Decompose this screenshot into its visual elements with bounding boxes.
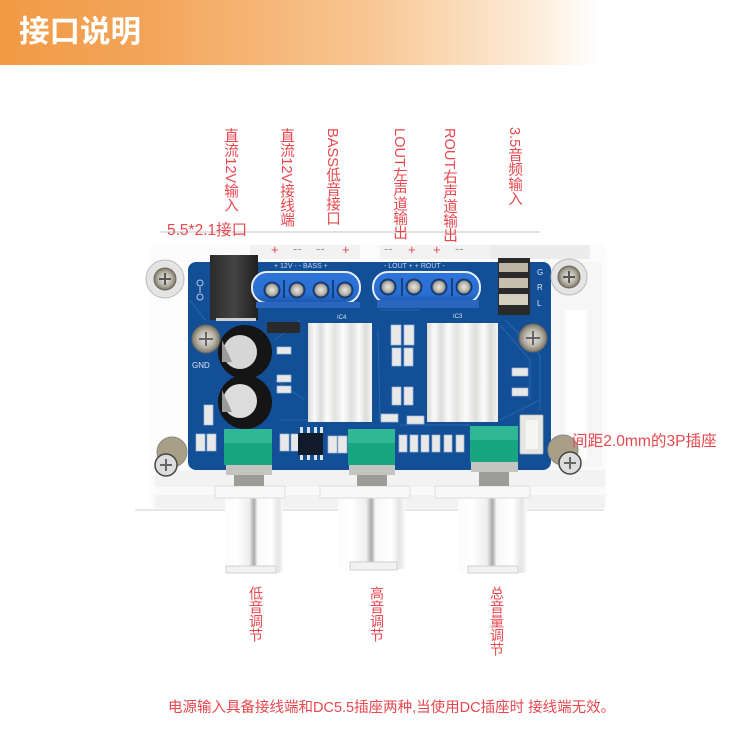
label: bass knob: 低音调节 — [248, 586, 264, 642]
acrylic case — [135, 232, 607, 510]
3.5mm audio jack — [498, 258, 543, 315]
DC power jack — [197, 255, 258, 321]
3.5mm audio jack: R — [537, 283, 543, 292]
3.5mm audio jack: G — [537, 268, 543, 277]
3.5mm audio jack: L — [537, 299, 542, 308]
left terminal block: + 12V - - BASS + — [274, 263, 328, 270]
case top polarity marks: + — [433, 242, 441, 257]
label: treble knob: 高音调节 — [369, 586, 385, 642]
case top polarity marks: + — [342, 242, 350, 257]
case top polarity marks: + — [271, 242, 279, 257]
right terminal block — [373, 263, 480, 308]
heatsink IC4 — [308, 315, 372, 422]
case top polarity marks: -- — [384, 241, 393, 256]
left terminal block — [252, 263, 360, 308]
case top polarity marks: -- — [316, 241, 325, 256]
header banner — [0, 0, 750, 65]
case top polarity marks: -- — [455, 241, 464, 256]
title: 接口说明 — [19, 15, 141, 49]
right terminal block: - LOUT + + ROUT - — [384, 263, 445, 270]
capacitors — [218, 322, 300, 429]
label: 3P socket: 间距2.0mm的3P插座 — [572, 433, 717, 450]
case and board screws — [146, 259, 587, 476]
GND label: GND — [192, 361, 210, 370]
label: ROUT: ROUT右声道输出 — [441, 128, 457, 242]
3P connector — [520, 415, 543, 454]
case top polarity marks: -- — [293, 241, 302, 256]
knob: bass — [225, 487, 283, 573]
label: 5.5*2.1 jack: 5.5*2.1接口 — [167, 222, 247, 239]
case top polarity marks — [271, 241, 464, 257]
footer note: 电源输入具备接线端和DC5.5插座两种,当使用DC插座时 接线端无效。 — [168, 700, 615, 716]
knob: treble — [338, 487, 405, 570]
circuit board — [188, 262, 551, 470]
SMD components — [196, 325, 528, 460]
heatsink IC4: IC4 — [337, 315, 347, 321]
label: volume knob: 总音量调节 — [489, 586, 505, 656]
case top polarity marks: + — [408, 242, 416, 257]
label: LOUT: LOUT左声道输出 — [391, 128, 407, 240]
label: BASS output: BASS低音接口 — [324, 128, 340, 225]
potentiometers — [224, 426, 518, 486]
heatsink IC3: IC3 — [453, 314, 463, 320]
heatsink IC3 — [427, 314, 498, 422]
label: DC 12V terminal: 直流12V接线端 — [278, 128, 294, 227]
label: DC 12V input: 直流12V输入 — [222, 128, 238, 212]
acrylic front plate — [215, 486, 530, 498]
knob: volume — [458, 487, 527, 573]
label: 3.5 audio input: 3.5音频输入 — [506, 127, 522, 206]
